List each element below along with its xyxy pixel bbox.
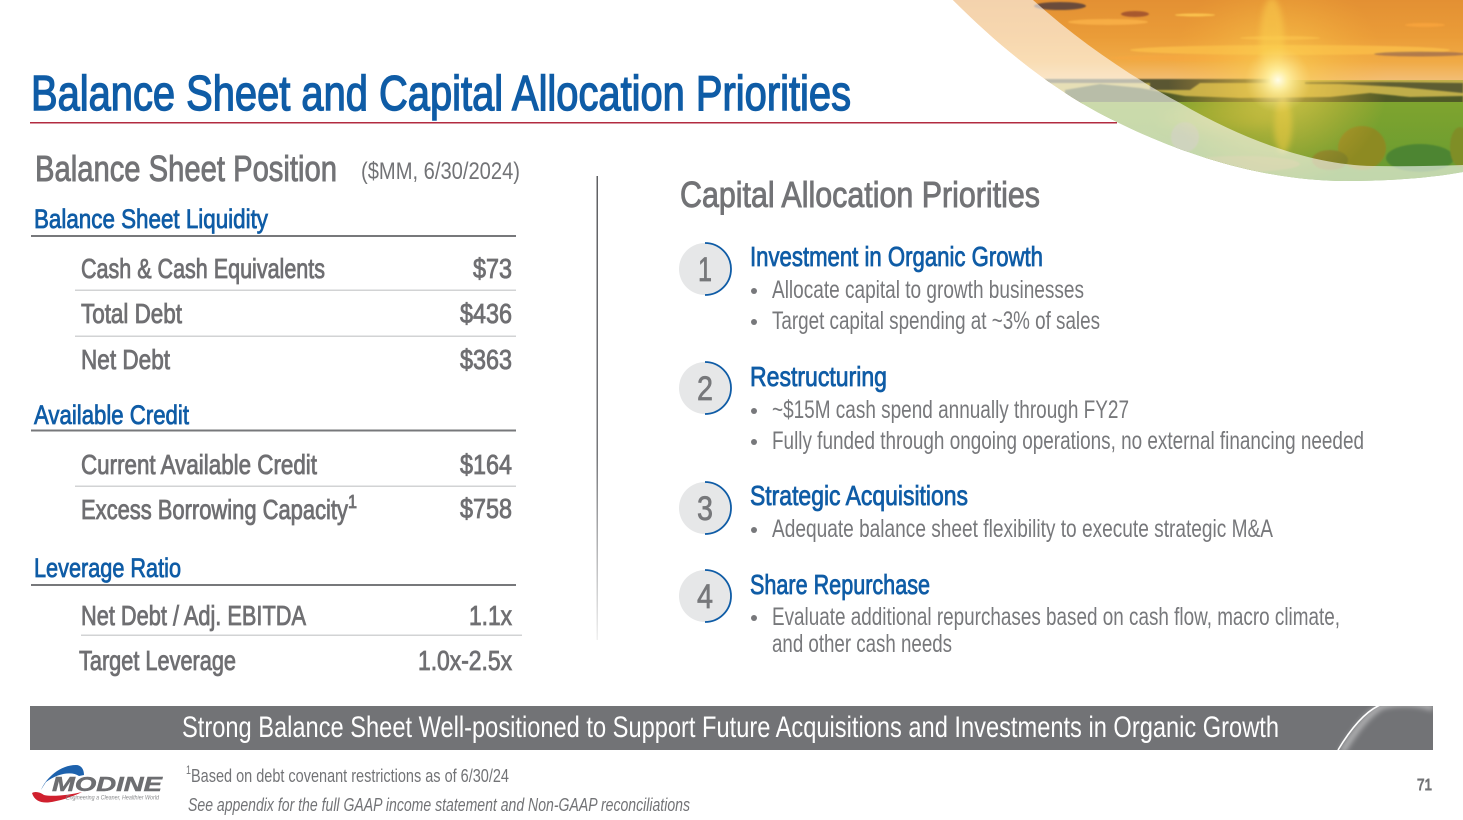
section: leverage ratio: Leverage Ratio	[34, 553, 181, 583]
priority 3	[679, 480, 1273, 543]
row: excess borrowing capacity: $758	[460, 493, 512, 524]
image: sunset over green field	[940, 0, 1463, 184]
banner	[30, 706, 1433, 750]
row: current available credit: Current Available Credit	[81, 449, 317, 480]
priority 1: 1	[698, 251, 712, 289]
row: cash: Cash & Cash Equivalents	[81, 253, 325, 284]
logo: Modine: MODINE	[52, 774, 163, 796]
panel: capital allocation priorities	[679, 174, 1364, 658]
priority 1: Allocate capital to growth businesses	[772, 276, 1084, 304]
row: net debt to adj ebitda	[81, 600, 512, 631]
priority 3: 3	[697, 490, 713, 528]
panel: balance sheet position	[31, 148, 522, 676]
row: net debt: $363	[460, 344, 512, 375]
footnote: Based on debt covenant restrictions as of 6/30/24	[191, 766, 509, 786]
row: net debt to adj ebitda: 1.1x	[469, 600, 512, 631]
row: cash: $73	[473, 253, 512, 284]
priority 2	[679, 361, 1364, 455]
row: total debt: $436	[460, 298, 512, 329]
priority 4	[679, 569, 1340, 658]
row: net debt: Net Debt	[81, 344, 170, 375]
row: current available credit: $164	[460, 449, 512, 480]
priority 1: Target capital spending at ~3% of sales	[772, 307, 1100, 335]
priority 3: Adequate balance sheet flexibility to execute strategic M&A	[772, 515, 1273, 543]
units note: ($MM, 6/30/2024)	[361, 158, 520, 185]
row: target leverage: 1.0x-2.5x	[418, 645, 512, 676]
priority 1	[679, 241, 1100, 335]
footnote: See appendix for the full GAAP income statement and Non-GAAP reconciliations	[188, 795, 690, 815]
title: Balance Sheet and Capital Allocation Priorities	[31, 67, 851, 121]
priority 4: and other cash needs	[772, 630, 952, 658]
row: target leverage	[79, 645, 512, 676]
priority 4: 4	[697, 578, 713, 616]
row: excess borrowing capacity: 1	[348, 492, 357, 512]
row: excess borrowing capacity: Excess Borrowing Capacity	[81, 494, 348, 525]
section: balance sheet liquidity: Balance Sheet Liquidity	[34, 204, 268, 234]
footnote: 1	[186, 763, 191, 777]
priority 2: ~$15M cash spend annually through FY27	[772, 396, 1129, 424]
row: net debt to adj ebitda: Net Debt / Adj. EBITDA	[81, 600, 306, 631]
footnote	[186, 763, 690, 815]
section: available credit: Available Credit	[34, 400, 189, 430]
heading: balance sheet position: Balance Sheet Position	[35, 148, 337, 189]
logo: Modine	[32, 765, 163, 803]
priority 2: 2	[697, 370, 713, 408]
priority 3: Strategic Acquisitions	[750, 480, 968, 511]
row: total debt: Total Debt	[81, 298, 182, 329]
priority 2: Restructuring	[750, 361, 887, 392]
row: net debt	[81, 344, 512, 375]
row: total debt	[81, 298, 512, 329]
row: current available credit	[81, 449, 512, 480]
heading: capital allocation priorities: Capital Allocation Priorities	[680, 174, 1040, 215]
logo: Modine: Engineering a Cleaner, Healthier World	[66, 796, 160, 802]
priority 1: Investment in Organic Growth	[750, 241, 1043, 272]
row: target leverage: Target Leverage	[79, 645, 236, 676]
veil	[953, 0, 1463, 182]
page number: 71	[1417, 777, 1432, 794]
priority 4: Share Repurchase	[750, 569, 930, 600]
